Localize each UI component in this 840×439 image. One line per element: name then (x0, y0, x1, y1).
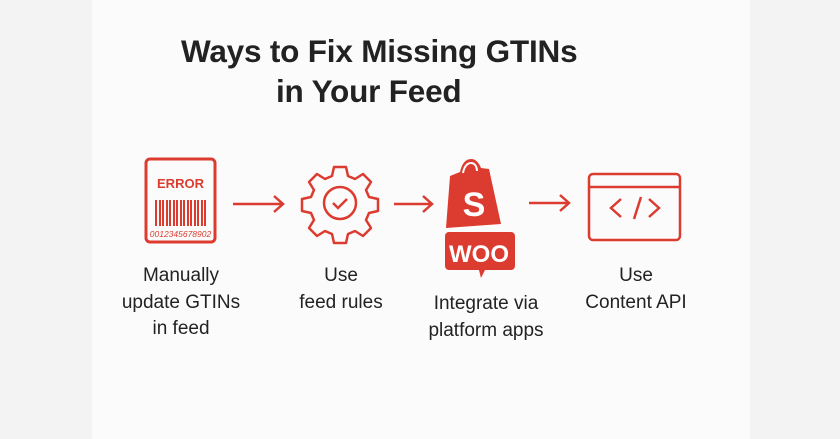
title: in Your Feed (276, 73, 461, 109)
label 4: Use (619, 265, 653, 286)
icon: shopify and woo: WOO (449, 241, 509, 268)
arrow 2 (394, 196, 432, 212)
icon: barcode error: 0012345678902 (150, 229, 211, 239)
label 3: platform apps (428, 320, 544, 340)
icon: shopify and woo: S (463, 186, 485, 224)
label 1: Manually (143, 265, 219, 286)
label 1 (122, 265, 240, 339)
icon: barcode error: ERROR (157, 176, 205, 191)
label 3 (428, 293, 544, 340)
label 4: Content API (585, 292, 687, 312)
title: Ways to Fix Missing GTINs (181, 33, 577, 69)
arrow 1 (233, 196, 283, 212)
label 2: feed rules (299, 292, 383, 312)
label 3: Integrate via (434, 293, 538, 314)
label 2 (299, 265, 383, 312)
icon: barcode error (146, 159, 215, 242)
label 1: in feed (152, 318, 210, 339)
icon: shopify and woo (445, 159, 515, 278)
label 4 (585, 265, 687, 312)
title (181, 33, 577, 109)
arrow 3 (529, 195, 569, 211)
icon: gear (302, 167, 378, 243)
label 1: update GTINs (122, 292, 240, 312)
icon: code window (589, 174, 680, 240)
label 2: Use (324, 265, 358, 286)
